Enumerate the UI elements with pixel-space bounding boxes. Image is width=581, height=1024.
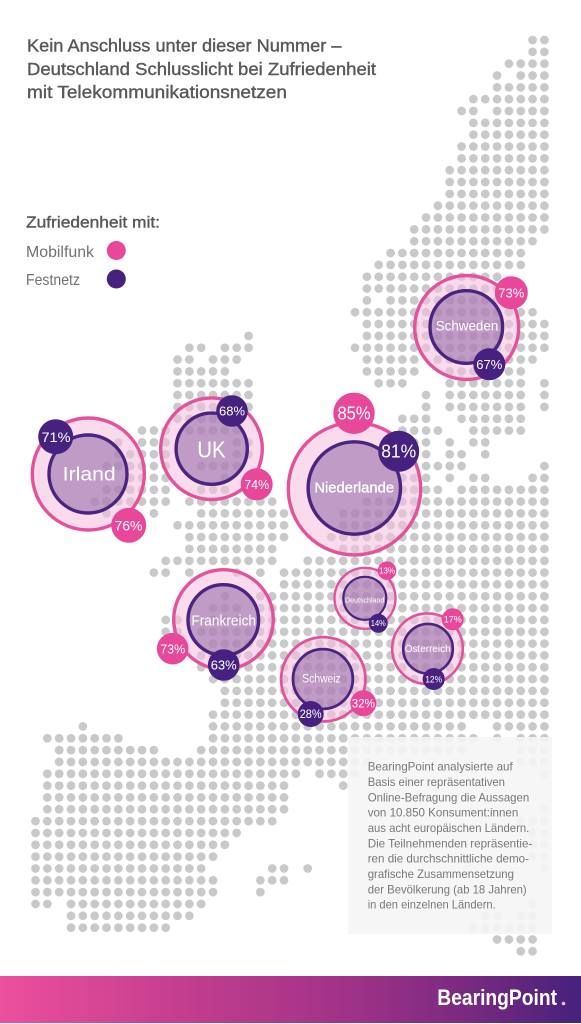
methodology text box: grafische Zusammensetzung (368, 867, 514, 881)
badge: Deutschland Festnetz 14%: 14% (371, 619, 386, 628)
badge: Niederlande Festnetz 81% (378, 431, 419, 472)
bubble: Frankreich: Frankreich (191, 613, 256, 630)
badge: Schweden Mobilfunk 73%: 73% (498, 285, 525, 300)
badge: Niederlande Mobilfunk 85%: 85% (338, 404, 370, 424)
badge: Frankreich Festnetz 63%: 63% (211, 658, 237, 673)
bubble: Österreich: Österreich (405, 643, 451, 655)
bubble: UK: UK (197, 436, 226, 462)
bubble: Niederlande: Niederlande (314, 481, 394, 497)
methodology text box: Die Teilnehmenden repräsentie- (368, 836, 532, 850)
dot map of Europe (36, 40, 545, 951)
badge: Schweiz Festnetz 28%: 28% (300, 709, 322, 721)
legend dot: Mobilfunk (107, 241, 126, 260)
bubble: UK (161, 395, 273, 500)
bubble: Irland (32, 418, 146, 543)
methodology text box: Online-Befragung die Aussagen (368, 790, 529, 804)
badge: Österreich Festnetz 12%: 12% (425, 674, 443, 685)
title (27, 36, 376, 102)
legend (26, 214, 160, 289)
legend label: Festnetz: Festnetz (26, 272, 80, 289)
title: Kein Anschluss unter dieser Nummer – (27, 36, 342, 56)
badge: Schweiz Mobilfunk 32%: 32% (352, 698, 375, 710)
badge: Frankreich Mobilfunk 73%: 73% (160, 641, 186, 656)
logo: BearingPoint: BearingPoint (437, 985, 558, 1010)
bubble: Schweiz (281, 637, 376, 727)
badge: Niederlande Festnetz 81%: 81% (381, 442, 416, 462)
badge: Irland Festnetz 71%: 71% (42, 429, 70, 445)
badge: UK Festnetz 68%: 68% (219, 404, 245, 419)
title: mit Telekommunikationsnetzen (27, 82, 287, 102)
methodology text box: der Bevölkerung (ab 18 Jahren) (368, 882, 527, 896)
bubble: Deutschland: Deutschland (345, 595, 384, 604)
bubble: Frankreich (157, 570, 273, 681)
bubble: Österreich (392, 608, 464, 690)
legend heading: Zufriedenheit mit: (26, 214, 160, 232)
badge: UK Mobilfunk 74%: 74% (244, 477, 270, 492)
methodology text box: aus acht europäischen Ländern. (368, 821, 529, 835)
bubble: Irland: Irland (63, 465, 116, 486)
badge: Schweden Festnetz 67%: 67% (476, 357, 503, 372)
legend dot: Festnetz (107, 270, 126, 288)
bubble: Schweden: Schweden (436, 319, 498, 334)
bubble: Schweden (415, 276, 528, 380)
legend label: Mobilfunk: Mobilfunk (26, 244, 95, 261)
bubble: Schweiz: Schweiz (302, 674, 341, 686)
methodology text box: in den einzelnen Ländern. (368, 898, 496, 912)
badge: Niederlande Mobilfunk 85% (333, 393, 375, 434)
bubble: Niederlande (288, 393, 421, 555)
bubble: Deutschland (334, 561, 396, 633)
methodology text box (348, 737, 552, 934)
footer band (0, 976, 581, 1023)
methodology text box: von 10.850 Konsument:innen (368, 806, 518, 820)
methodology text box: Basis einer repräsentativen (368, 775, 505, 789)
methodology text box: BearingPoint analysierte auf (368, 760, 513, 774)
badge: Irland Mobilfunk 76%: 76% (114, 517, 142, 533)
methodology text box: ren die durchschnittliche demo- (368, 852, 529, 866)
badge: Deutschland Mobilfunk 13%: 13% (379, 567, 395, 576)
badge: Österreich Mobilfunk 17%: 17% (444, 615, 462, 626)
title: Deutschland Schlusslicht bei Zufriedenheit (27, 59, 376, 79)
